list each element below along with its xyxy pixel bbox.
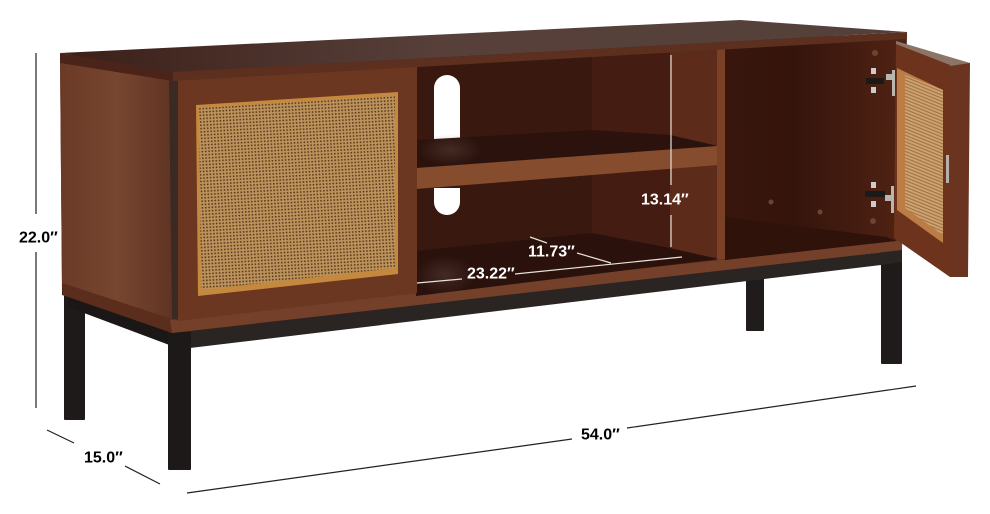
label: 13.14″ <box>641 192 689 208</box>
door edge <box>169 80 179 320</box>
line <box>417 257 682 283</box>
open right door <box>894 41 970 277</box>
right compartment <box>725 36 896 260</box>
dimension: inner width 23.22 <box>417 257 682 283</box>
shelf surface <box>416 130 718 168</box>
shelf pin holes <box>768 50 878 224</box>
front left leg <box>168 332 191 470</box>
divider <box>717 45 726 260</box>
back wall <box>416 54 593 256</box>
cane panel <box>199 96 395 290</box>
label: 23.22″ <box>467 266 515 282</box>
floor reflection <box>415 255 475 295</box>
door frame <box>178 65 417 321</box>
left door <box>169 65 417 321</box>
label: 15.0″ <box>84 450 123 466</box>
front frame rail <box>168 250 902 348</box>
cable slot lower <box>434 188 460 215</box>
dimension: inner depth 11.73 <box>528 237 611 263</box>
line <box>187 386 916 493</box>
shelf front <box>416 146 718 189</box>
line <box>35 53 37 408</box>
side panel <box>60 60 174 320</box>
gold inner frame <box>196 92 398 296</box>
door handle <box>946 155 949 183</box>
cane panel <box>905 75 943 235</box>
back middle leg <box>746 278 764 331</box>
door edge <box>950 62 970 277</box>
upper hinge <box>866 68 895 96</box>
cabinet body backing <box>60 34 907 333</box>
back left leg <box>64 295 85 420</box>
floor <box>416 233 718 296</box>
inner side wall <box>670 48 718 258</box>
lower hinge <box>865 182 894 213</box>
line <box>47 430 160 484</box>
top surface <box>60 20 907 72</box>
front right leg <box>881 250 902 364</box>
label: 11.73″ <box>528 244 575 260</box>
tabletop <box>60 20 907 81</box>
dimension: depth 15.0 <box>47 430 160 484</box>
back wall right <box>592 50 672 256</box>
top front edge <box>173 32 907 81</box>
back wall <box>725 36 896 260</box>
shelf reflection <box>418 134 482 166</box>
door inner face <box>894 44 950 277</box>
dimension: width 54.0 <box>187 386 916 493</box>
open compartment <box>415 45 726 296</box>
label: 22.0″ <box>19 230 58 246</box>
cable slot upper <box>434 75 460 139</box>
label: 54.0″ <box>581 426 620 444</box>
door top edge <box>896 41 970 66</box>
side plinth <box>62 283 172 333</box>
line <box>670 55 672 247</box>
side frame rail <box>68 295 172 346</box>
floor <box>725 217 896 260</box>
base front strip <box>170 240 902 333</box>
top side edge <box>60 53 173 81</box>
tan inner frame <box>897 68 943 243</box>
line <box>530 237 611 263</box>
